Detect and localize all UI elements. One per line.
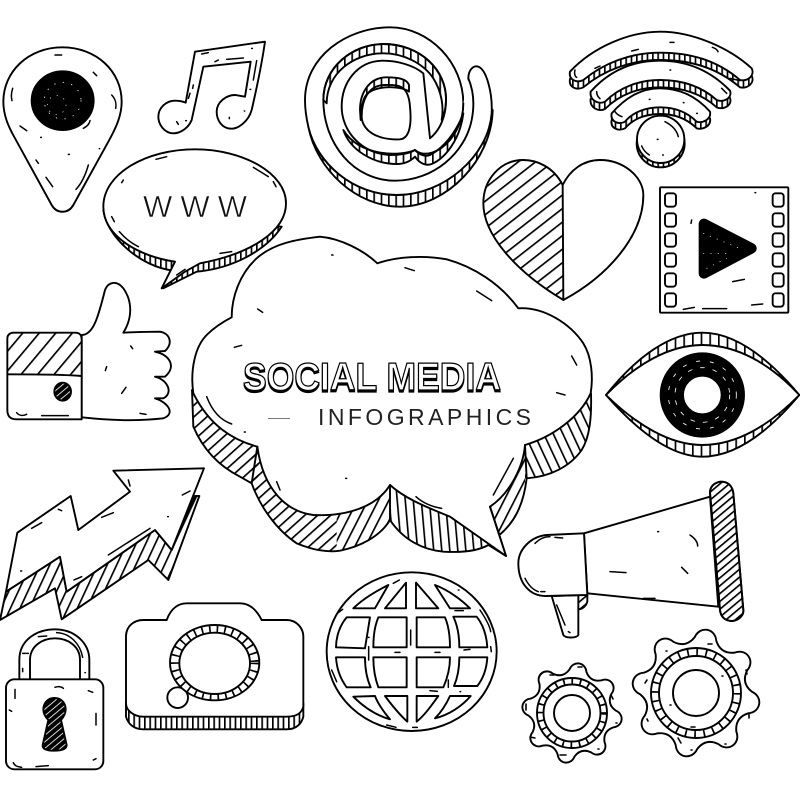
subtitle dash <box>268 418 290 420</box>
icon: wifi signal <box>570 32 753 167</box>
icon: globe <box>327 572 497 731</box>
icon: eye <box>606 333 799 457</box>
icon: music note <box>158 42 265 133</box>
icon: rising arrow <box>0 468 204 620</box>
icon: large gear <box>622 619 770 767</box>
icon: half hatched heart <box>480 157 643 303</box>
title: social media: SOCIAL MEDIA <box>243 356 501 399</box>
icon: www speech bubble <box>103 149 286 288</box>
icon: location pin <box>3 47 122 212</box>
panel: central cloud speech bubble <box>187 237 595 563</box>
www text: WWW <box>143 189 248 224</box>
icon: small gear <box>515 656 629 770</box>
icon: camera <box>126 603 303 729</box>
icon: at sign <box>305 27 493 207</box>
icon: megaphone <box>518 482 743 637</box>
icon: thumbs up <box>7 283 171 420</box>
subtitle: infographics: INFOGRAPHICS <box>318 404 531 430</box>
icon: padlock <box>6 629 103 769</box>
icon: film strip with play button <box>660 187 788 313</box>
